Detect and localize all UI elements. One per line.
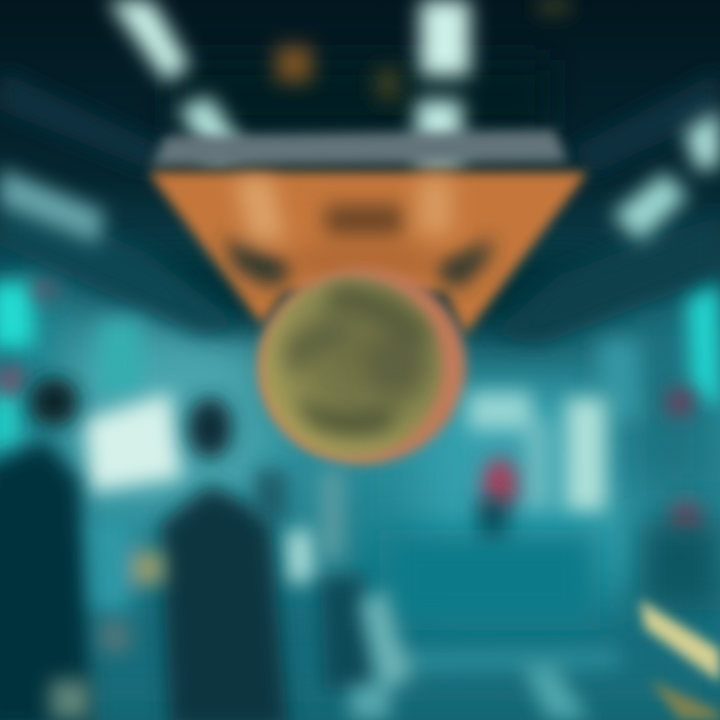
- lower hall glow: [0, 270, 720, 720]
- dark figure on the left: [0, 378, 92, 720]
- grey bar above the orange frame: [152, 130, 568, 166]
- bright teal side screens: [0, 282, 720, 448]
- ceiling amber spots: [276, 0, 570, 100]
- dark band behind the frame: [110, 60, 620, 330]
- orange inverted frame: [148, 172, 588, 335]
- orange frame details: [225, 178, 495, 290]
- ceiling beams: [0, 70, 720, 345]
- dark central figure: [160, 398, 288, 720]
- red accents: [0, 279, 702, 536]
- floor tones: [380, 520, 720, 630]
- background figures: [255, 470, 508, 690]
- suspended coin: [258, 268, 466, 464]
- golden lit rail at bottom right: [640, 600, 720, 720]
- ceiling light panels: [0, 0, 720, 244]
- white glowing panels: [85, 392, 606, 582]
